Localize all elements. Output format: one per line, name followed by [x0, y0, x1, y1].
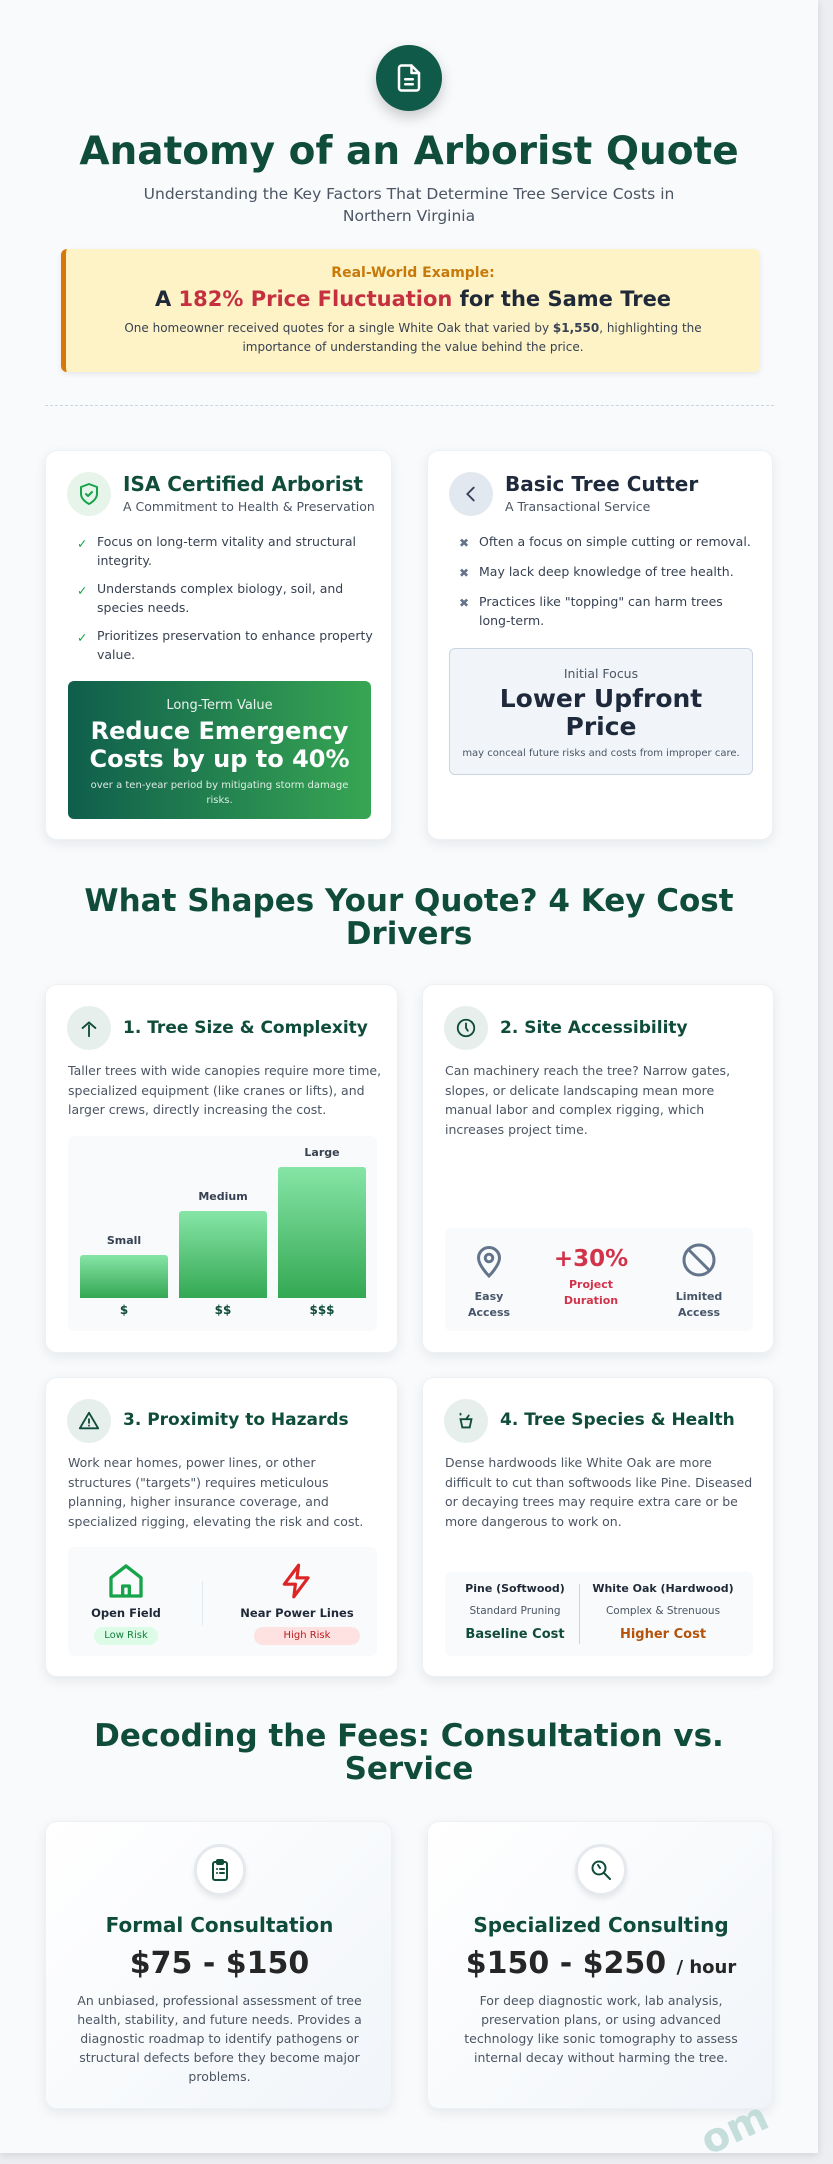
panel: site accessibility [422, 984, 774, 1353]
title: Anatomy of an Arborist Quote [79, 129, 739, 174]
list: cutter drawbacks: May lack deep knowledge of tree health. [479, 564, 734, 579]
callout: lower upfront price [449, 648, 753, 775]
callout: real-world example: A 182% Price Fluctuation for the Same Tree [155, 287, 671, 311]
list: arborist benefits [77, 534, 373, 662]
comparison: access duration: Access [678, 1306, 720, 1319]
panel: specialized consulting [427, 1821, 773, 2109]
comparison: species cost: Pine (Softwood) [465, 1582, 565, 1595]
watermark: om [694, 2094, 776, 2164]
comparison: species cost: Higher Cost [620, 1627, 706, 1642]
icon: clipboard [194, 1844, 246, 1896]
heading: 4 key cost drivers: What Shapes Your Quote? 4 Key Cost Drivers [84, 883, 734, 952]
comparison: access duration: Access [468, 1306, 510, 1319]
panel: ISA certified arborist: A Commitment to Health & Preservation [123, 499, 375, 514]
list: cutter drawbacks: ✖ [459, 536, 469, 550]
comparison: access duration: Limited [676, 1290, 722, 1303]
panel: formal consultation [45, 1821, 392, 2109]
callout: real-world example: Real-World Example: [331, 265, 495, 281]
panel: basic tree cutter: A Transactional Service [505, 499, 650, 514]
panel: specialized consulting: For deep diagnostic work, lab analysis, preservation plans, or using advanced technology like sonic tomography to assess internal decay without harming the tree. [464, 1993, 738, 2065]
comparison: risk: Near Power Lines [240, 1606, 354, 1620]
panel: basic tree cutter [427, 450, 773, 840]
callout: lower upfront price: Lower Upfront [500, 684, 702, 713]
list: cutter drawbacks [459, 534, 751, 628]
panel: basic tree cutter: Basic Tree Cutter [505, 472, 698, 496]
panel: site accessibility: 2. Site Accessibility [500, 1018, 688, 1038]
bar chart: size vs cost: $ [120, 1303, 128, 1317]
comparison: risk [68, 1547, 377, 1656]
bar chart: size vs cost: Large [304, 1146, 340, 1159]
comparison: species cost: White Oak (Hardwood) [592, 1582, 734, 1595]
bar chart: size vs cost: $$$ [309, 1303, 335, 1317]
list: arborist benefits: ✓ [77, 536, 87, 551]
comparison: species cost [445, 1572, 753, 1656]
comparison: species cost: Baseline Cost [465, 1627, 565, 1642]
comparison: access duration: Easy [475, 1290, 503, 1303]
comparison: access duration [445, 1228, 753, 1331]
icon: warning [67, 1399, 111, 1443]
panel: species: Dense hardwoods like White Oak are more difficult to cut than softwoods like Pine. Diseased or decaying trees may require extra care or be more dangerous to work on. [445, 1455, 752, 1528]
panel: hazards: 3. Proximity to Hazards [123, 1410, 349, 1430]
icon: cross [449, 472, 493, 516]
comparison: risk: Low Risk [104, 1630, 148, 1641]
panel: tree size: Taller trees with wide canopies require more time, specialized equipment (like cranes or lifts), and larger crews, directly increasing the cost. [68, 1063, 381, 1117]
list: cutter drawbacks: ✖ [459, 566, 469, 580]
callout: long-term value [68, 681, 371, 819]
panel: site accessibility: Can machinery reach the tree? Narrow gates, slopes, or delicate landscaping mean more manual labor and complex rigging, which increases project time. [445, 1063, 730, 1136]
panel: tree size: 1. Tree Size & Complexity [123, 1018, 368, 1038]
comparison: risk: High Risk [284, 1630, 330, 1641]
callout: real-world example [61, 249, 760, 372]
list: cutter drawbacks: Often a focus on simple cutting or removal. [479, 534, 751, 549]
comparison: access duration: Duration [564, 1294, 618, 1307]
list: cutter drawbacks: ✖ [459, 596, 469, 610]
panel: specialized consulting: $150 - $250 / hour [466, 1946, 736, 1981]
comparison: access duration: +30% [554, 1246, 628, 1272]
icon: pin [477, 1246, 501, 1278]
comparison: access duration: Project [569, 1278, 613, 1291]
icon: magnifier [575, 1844, 627, 1896]
icon: lightning [282, 1564, 310, 1598]
icon: ban [682, 1244, 716, 1276]
panel: formal consultation: $75 - $150 [130, 1946, 309, 1981]
heading: decoding the fees: Decoding the Fees: Consultation vs. Service [94, 1718, 724, 1787]
icon: clock [444, 1006, 488, 1050]
panel: tree size [45, 984, 398, 1353]
panel: formal consultation: Formal Consultation [106, 1913, 333, 1937]
panel: ISA certified arborist: ISA Certified Arborist [123, 472, 363, 496]
callout: lower upfront price: may conceal future risks and costs from improper care. [462, 748, 740, 759]
comparison: species cost: Complex & Strenuous [606, 1605, 720, 1617]
callout: real-world example: One homeowner received quotes for a single White Oak that varied by $1,550, highlighting the importance of understanding the value behind the price. [124, 321, 702, 354]
panel: species: 4. Tree Species & Health [500, 1410, 735, 1430]
subtitle: Understanding the Key Factors That Determine Tree Service Costs in Northern Virginia [144, 185, 674, 225]
panel: formal consultation: An unbiased, professional assessment of tree health, stability, and future needs. Provides a diagnostic roadmap to identify pathogens or structural defects before they become major problems. [77, 1993, 362, 2084]
comparison: risk: Open Field [91, 1606, 161, 1620]
icon: tree [67, 1006, 111, 1050]
icon: shield [67, 472, 111, 516]
panel: hazards [45, 1377, 398, 1677]
list: cutter drawbacks: Practices like "topping" can harm trees long-term. [479, 594, 723, 628]
panel: ISA certified arborist [45, 450, 392, 840]
icon: sprout [444, 1399, 488, 1443]
comparison: species cost: Standard Pruning [469, 1605, 561, 1617]
icon: house [109, 1564, 143, 1598]
bar chart: size vs cost: Small [107, 1234, 141, 1247]
callout: long-term value: Long-Term Value [166, 698, 273, 713]
list: arborist benefits: Understands complex biology, soil, and species needs. [97, 581, 343, 615]
bar chart: size vs cost [68, 1136, 377, 1331]
bar chart: size vs cost: Medium [198, 1190, 248, 1203]
panel: hazards: Work near homes, power lines, or other structures ("targets") requires meticulous planning, higher insurance coverage, and specialized rigging, elevating the risk and cost. [68, 1455, 363, 1528]
panel: species [422, 1377, 774, 1677]
list: arborist benefits: ✓ [77, 583, 87, 598]
list: arborist benefits: Prioritizes preservation to enhance property value. [97, 628, 373, 662]
bar chart: size vs cost: $$ [215, 1303, 231, 1317]
list: arborist benefits: Focus on long-term vitality and structural integrity. [97, 534, 356, 568]
icon: header document [376, 45, 442, 111]
panel: specialized consulting: Specialized Consulting [473, 1913, 729, 1937]
callout: long-term value: over a ten-year period by mitigating storm damage risks. [91, 780, 348, 806]
callout: long-term value: Reduce Emergency Costs by up to 40% [89, 717, 350, 773]
callout: lower upfront price: Initial Focus [564, 666, 638, 681]
callout: lower upfront price: Price [566, 712, 636, 741]
list: arborist benefits: ✓ [77, 630, 87, 645]
